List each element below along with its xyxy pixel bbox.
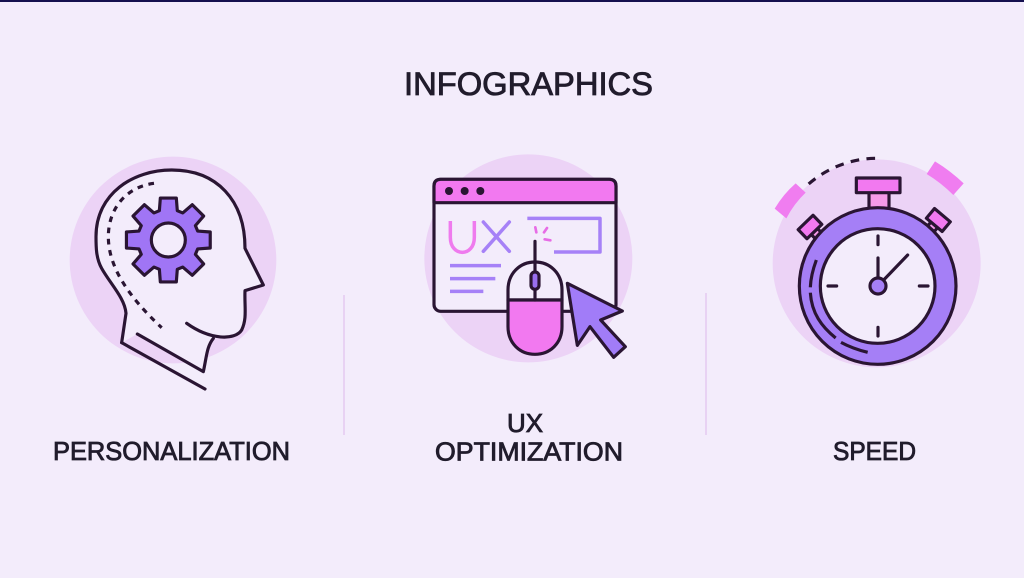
cursor arrow (567, 283, 625, 357)
label: personalization: PERSONALIZATION (53, 438, 290, 466)
label: speed: SPEED (833, 438, 916, 466)
stopwatch face (820, 229, 935, 343)
title: INFOGRAPHICS (404, 66, 653, 102)
background circle: speed (773, 159, 981, 367)
mouse wheel (531, 272, 539, 289)
mouse (508, 262, 562, 300)
icon: UX window, mouse and cursor (424, 154, 632, 362)
dashed arc (108, 183, 162, 328)
side button right (921, 209, 950, 238)
icon: stopwatch (773, 158, 981, 367)
tick marks (828, 236, 928, 336)
window dots (445, 187, 484, 195)
label: UX optimization (435, 410, 623, 466)
top button (869, 192, 889, 211)
browser window (434, 179, 616, 311)
click sparks (535, 227, 550, 240)
window title bar (434, 179, 616, 203)
dashed arc (809, 158, 880, 184)
stopwatch case (799, 208, 956, 364)
label: UX optimization: OPTIMIZATION (435, 438, 623, 466)
divider lines (344, 293, 706, 435)
head outline (96, 170, 263, 372)
case highlights (810, 260, 868, 352)
input box (527, 218, 600, 252)
icon: head with gear (70, 157, 276, 389)
side button left (798, 215, 828, 245)
speed marks (775, 161, 964, 218)
gear (126, 198, 210, 282)
neck line (122, 343, 205, 389)
background circle: personalization (70, 157, 276, 363)
label: UX optimization: UX (507, 410, 543, 438)
text lines (450, 266, 501, 291)
UX lettering (450, 221, 474, 252)
background circle: UX (424, 154, 632, 362)
clock hands (878, 255, 908, 280)
centre hub (870, 278, 886, 294)
